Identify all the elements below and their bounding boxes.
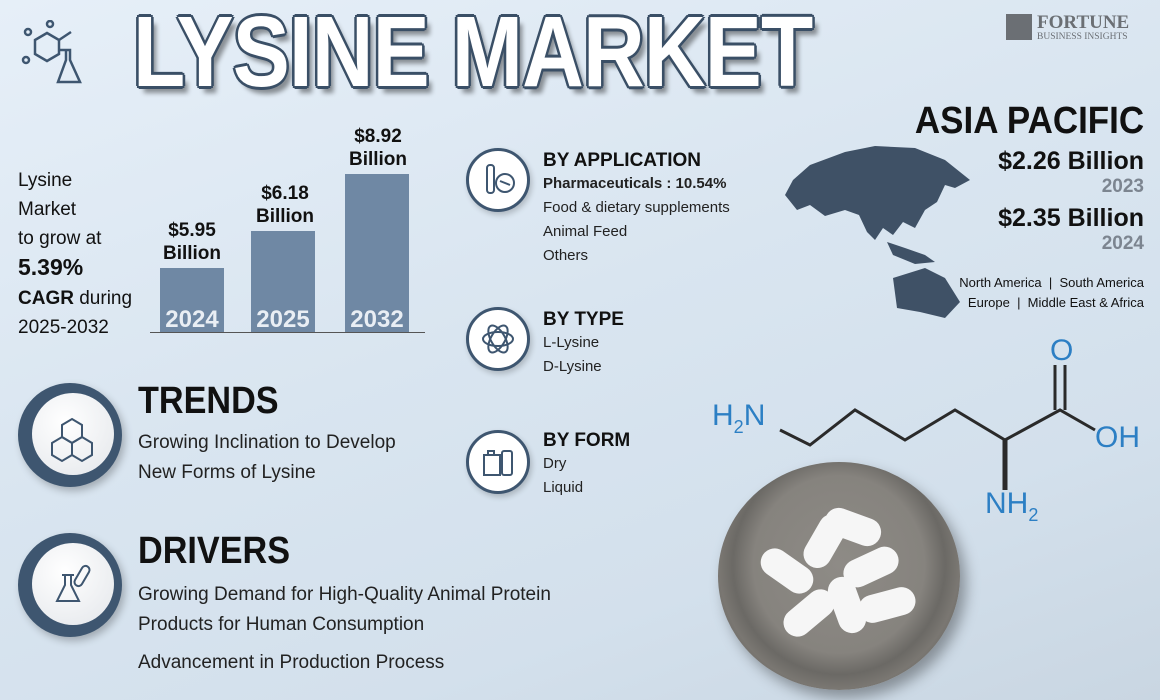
text: asia pacific stats: $2.35 Billion [998, 204, 1144, 232]
panel: drivers: Advancement in Production Process [138, 652, 444, 673]
text: asia pacific stats: North America | South America [959, 275, 1144, 290]
chart: lysine structure: H [712, 399, 734, 432]
bar chart: $8.92 [354, 126, 402, 147]
chart: lysine structure: 2 [1028, 505, 1038, 525]
panel: by type: L-Lysine [543, 334, 599, 351]
panel: by application: Animal Feed [543, 223, 627, 240]
panel: by application: Pharmaceuticals : 10.54% [543, 175, 726, 192]
bar chart [150, 126, 425, 333]
text: asia pacific stats: ASIA PACIFIC [915, 100, 1144, 142]
panel: drivers: DRIVERS [138, 530, 290, 572]
panel: by type [466, 307, 624, 376]
chart: lysine structure: N [744, 399, 765, 432]
panel: drivers [17, 530, 551, 673]
text: asia pacific stats: 2024 [1102, 233, 1144, 254]
logo [1006, 12, 1129, 42]
panel: by type: D-Lysine [543, 358, 602, 375]
panel: by form: Liquid [543, 479, 583, 496]
text: asia pacific stats [915, 100, 1144, 310]
map: asia pacific [785, 146, 970, 318]
chart: lysine structure: OH [1095, 421, 1140, 454]
text: asia pacific stats: $2.26 Billion [998, 147, 1144, 175]
panel: by application [466, 148, 730, 264]
bar chart: $6.18 [261, 183, 309, 204]
text: CAGR: to grow at [18, 228, 101, 249]
text: CAGR: Lysine [18, 170, 72, 191]
text: asia pacific stats: Europe | Middle East & Africa [968, 295, 1144, 310]
chart: lysine structure [712, 335, 1140, 525]
text: CAGR [18, 170, 132, 338]
panel: by form: Dry [543, 455, 566, 472]
panel: by application: Food & dietary supplements [543, 199, 730, 216]
panel: by application: BY APPLICATION [543, 150, 701, 171]
chart: lysine structure: 2 [734, 417, 744, 437]
text: CAGR: 2025-2032 [18, 317, 109, 338]
bar chart: $5.95 [168, 220, 216, 241]
illustration: bowl of pills [718, 462, 960, 690]
panel: drivers: Growing Demand for High-Quality Animal Protein [138, 584, 551, 605]
text: BUSINESS INSIGHTS [1037, 32, 1128, 42]
panel: by form [466, 430, 630, 500]
bar chart: 2032 [350, 306, 404, 333]
icon: molecule flask [22, 20, 82, 84]
text: CAGR: CAGR during [18, 288, 132, 309]
panel: by form: BY FORM [543, 430, 630, 451]
bar chart: 2025 [256, 306, 310, 333]
panel: trends: TRENDS [138, 380, 279, 422]
text: CAGR: Market [18, 199, 76, 220]
bar chart: Billion [256, 206, 314, 227]
bar chart: Billion [163, 243, 221, 264]
text: FORTUNE [1037, 12, 1129, 33]
panel: trends [17, 380, 396, 495]
panel: drivers: Products for Human Consumption [138, 614, 424, 635]
text: asia pacific stats: 2023 [1102, 176, 1144, 197]
text: CAGR: 5.39% [18, 254, 83, 280]
bar chart: 2024 [165, 306, 219, 333]
panel: by type: BY TYPE [543, 309, 624, 330]
panel: trends: Growing Inclination to Develop [138, 432, 396, 453]
panel: trends: New Forms of Lysine [138, 462, 316, 483]
panel: by application: Others [543, 247, 588, 264]
chart: lysine structure: NH [985, 487, 1028, 520]
bar chart: Billion [349, 149, 407, 170]
